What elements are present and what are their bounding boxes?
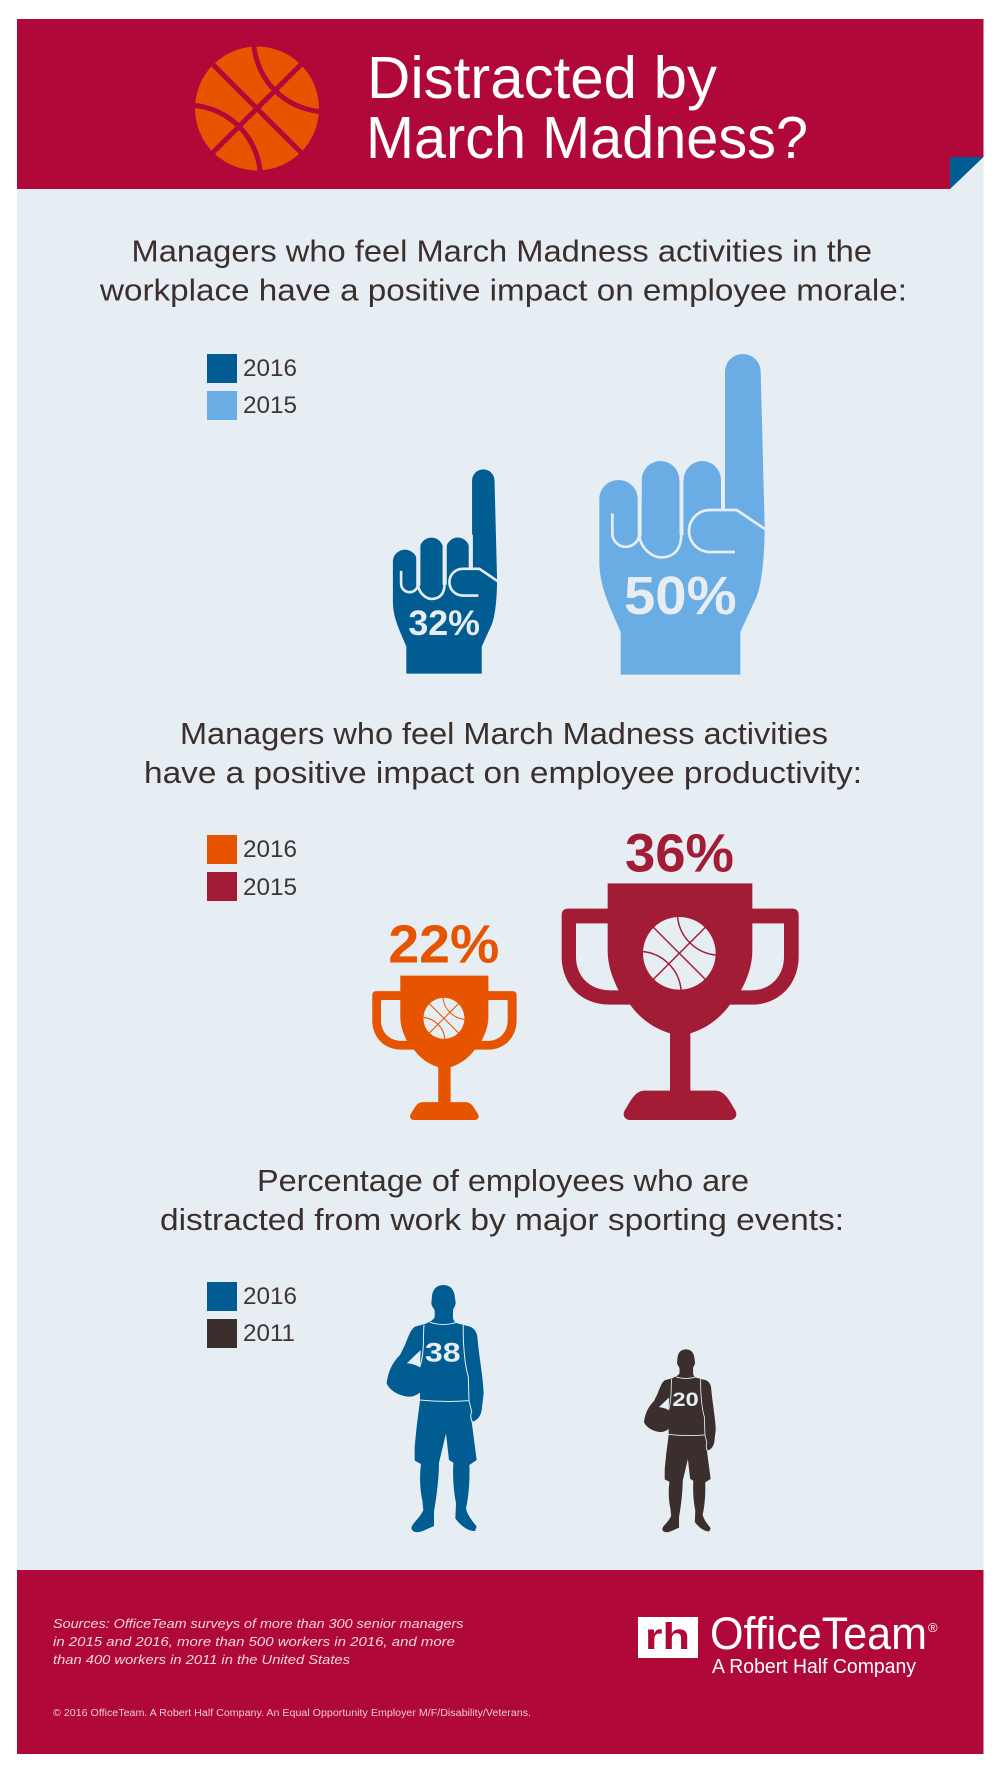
legend: productivity: 2016	[243, 836, 297, 863]
heading: morale: workplace have a positive impact on employee morale:	[99, 274, 907, 308]
heading: sporting events	[160, 1164, 844, 1237]
panel: employee productivity	[144, 717, 862, 1120]
logo: OfficeTeam	[638, 1608, 938, 1678]
legend: sporting events: 2011	[243, 1320, 295, 1347]
icon: basketball	[194, 45, 320, 172]
panel: employee morale	[99, 234, 907, 675]
heading: morale: Managers who feel March Madness activities in the	[132, 234, 872, 268]
heading: sporting events: distracted from work by major sporting events:	[160, 1203, 844, 1237]
crimson band	[17, 19, 984, 189]
title: Distracted by	[367, 45, 718, 111]
icon: foam finger 2016	[393, 469, 497, 674]
logo: OfficeTeam: OfficeTeam	[710, 1608, 927, 1659]
sources note: in 2015 and 2016, more than 500 workers in 2016, and more	[53, 1634, 455, 1649]
title	[366, 45, 808, 171]
logo: OfficeTeam: ®	[928, 1620, 938, 1635]
icon: player 38	[387, 1285, 484, 1532]
copyright: © 2016 OfficeTeam. A Robert Half Company. An Equal Opportunity Employer M/F/Disability/Veterans.	[53, 1708, 531, 1719]
legend: sporting events: 2016	[243, 1283, 297, 1310]
header band	[17, 19, 984, 189]
legend: productivity: 2015	[243, 874, 297, 901]
icon: trophy 2016	[372, 976, 517, 1120]
logo: OfficeTeam: A Robert Half Company	[712, 1656, 916, 1678]
panel: distracted employees	[160, 1164, 844, 1532]
icon: player 20	[644, 1349, 716, 1532]
title: March Madness?	[366, 105, 808, 171]
sources note	[53, 1616, 464, 1667]
logo: OfficeTeam: rh	[645, 1616, 690, 1657]
icon: trophy 2015	[562, 883, 799, 1120]
heading: productivity: have a positive impact on employee productivity:	[144, 756, 862, 790]
footer band	[17, 1570, 984, 1754]
value: 50%: 50%	[624, 566, 737, 626]
footer	[17, 1570, 984, 1754]
heading: productivity	[144, 717, 862, 790]
heading: morale	[99, 234, 907, 308]
legend: morale: 2016	[243, 355, 297, 382]
value: 32%: 32%	[408, 604, 480, 643]
legend: sporting events	[207, 1282, 297, 1348]
icon: foam finger 2015	[599, 354, 765, 675]
corner fold	[950, 157, 984, 189]
value: 22%: 22%	[388, 915, 499, 975]
sources note: Sources: OfficeTeam surveys of more than 300 senior managers	[53, 1616, 464, 1631]
legend: productivity	[207, 835, 297, 901]
sources note: than 400 workers in 2011 in the United States	[53, 1652, 351, 1667]
heading: sporting events: Percentage of employees who are	[257, 1164, 749, 1198]
legend: morale: 2015	[243, 392, 297, 419]
icon: player 20: 20	[672, 1389, 699, 1411]
heading: productivity: Managers who feel March Madness activities	[180, 717, 828, 751]
value: 36%: 36%	[625, 824, 734, 884]
icon: player 38: 38	[425, 1338, 461, 1368]
main light panel	[17, 150, 984, 1570]
legend: morale	[207, 354, 297, 420]
